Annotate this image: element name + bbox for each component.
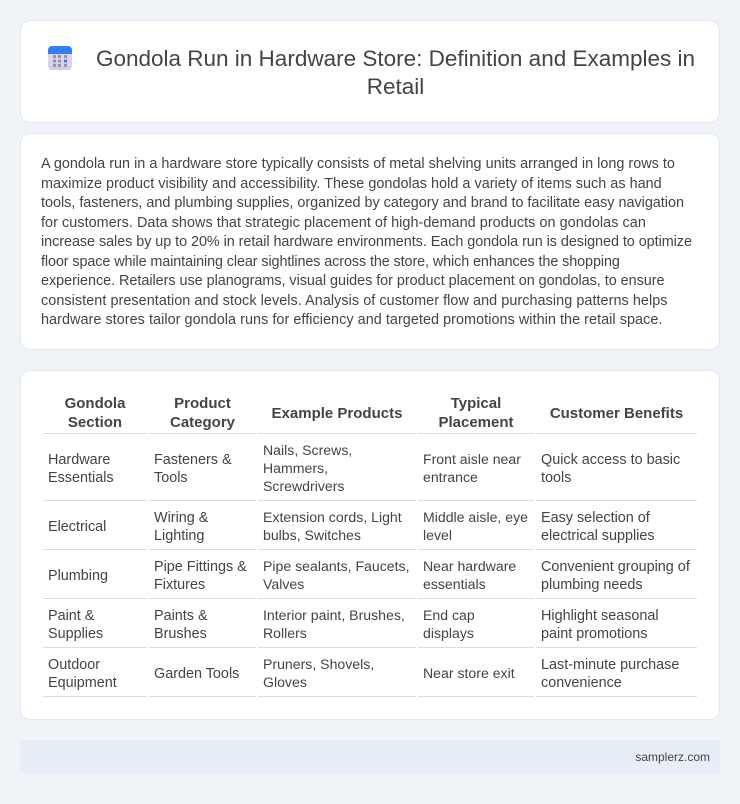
- table row: paint and supplies: displays: [423, 625, 474, 641]
- table row: electrical: electrical supplies: [541, 528, 655, 544]
- text block: description: floor space while maintaining clear sightlines across the store, which enhances the shopping: [41, 254, 620, 270]
- table row: outdoor equipment: Pruners, Shovels,: [263, 656, 374, 672]
- text block: description: [41, 156, 692, 328]
- text block: description: consistent presentation and stock levels. Analysis of customer flow and purchasing patterns helps: [41, 293, 668, 309]
- table row: paint and supplies: [43, 607, 697, 648]
- table header row: [43, 395, 697, 434]
- table row: electrical: Extension cords, Light: [263, 509, 402, 525]
- table row: plumbing: Fixtures: [154, 577, 205, 593]
- table row: plumbing: Valves: [263, 576, 304, 592]
- text block: description: experience. Retailers use planograms, visual guides for product placement on gondolas, to ensure: [41, 273, 664, 289]
- table row: plumbing: [43, 558, 697, 599]
- title: Gondola Run in Hardware Store: Definition and Examples in: [96, 46, 695, 71]
- table row: electrical: Wiring &: [154, 510, 208, 526]
- icon: calendar: [48, 46, 72, 70]
- table row: hardware essentials: Screwdrivers: [263, 478, 344, 494]
- table row: paint and supplies: Paint &: [48, 608, 94, 624]
- table header row: Typical: [451, 395, 501, 412]
- table row: electrical: [43, 509, 697, 550]
- text block: description: increase sales by up to 20% in retail hardware environments. Each gondola run is designed to optimize: [41, 234, 692, 250]
- title: [96, 46, 695, 99]
- table header row: Section: [68, 414, 122, 431]
- table header row: Customer Benefits: [550, 404, 683, 422]
- table header row: Category: [170, 414, 235, 431]
- table row: plumbing: Pipe Fittings &: [154, 559, 247, 575]
- table row: outdoor equipment: [43, 656, 697, 697]
- table row: hardware essentials: Hardware: [48, 452, 110, 468]
- panel: table card: [20, 370, 720, 720]
- text block: description: A gondola run in a hardware store typically consists of metal shelving units arranged in long rows to: [41, 156, 675, 172]
- table row: hardware essentials: entrance: [423, 469, 478, 485]
- table row: paint and supplies: Supplies: [48, 626, 103, 642]
- table row: hardware essentials: tools: [541, 470, 571, 486]
- table row: plumbing: plumbing needs: [541, 577, 643, 593]
- table row: hardware essentials: Front aisle near: [423, 451, 521, 467]
- table row: hardware essentials: Essentials: [48, 470, 114, 486]
- footer source text: samplerz.com: [635, 750, 710, 764]
- table row: hardware essentials: Tools: [154, 470, 188, 486]
- table row: outdoor equipment: Garden Tools: [154, 666, 239, 682]
- table header row: Gondola: [65, 395, 125, 412]
- table row: plumbing: Pipe sealants, Faucets,: [263, 558, 410, 574]
- table row: electrical: Middle aisle, eye: [423, 509, 528, 525]
- text block: description: tools, fasteners, and plumbing supplies, organized by category and brand to facilitate easy navigation: [41, 195, 684, 211]
- table row: electrical: bulbs, Switches: [263, 527, 361, 543]
- table row: plumbing: Near hardware: [423, 558, 516, 574]
- table row: plumbing: Convenient grouping of: [541, 559, 690, 575]
- table row: paint and supplies: paint promotions: [541, 626, 647, 642]
- table row: paint and supplies: Rollers: [263, 625, 307, 641]
- panel: title card: [20, 20, 720, 123]
- table row: plumbing: Plumbing: [48, 568, 108, 584]
- table row: electrical: Electrical: [48, 519, 106, 535]
- table row: electrical: level: [423, 527, 452, 543]
- table header row: Example Products: [272, 404, 402, 422]
- table row: electrical: Easy selection of: [541, 510, 650, 526]
- table row: outdoor equipment: Gloves: [263, 674, 307, 690]
- table row: plumbing: essentials: [423, 576, 486, 592]
- title: Retail: [367, 74, 424, 99]
- table row: paint and supplies: Brushes: [154, 626, 207, 642]
- table row: paint and supplies: Highlight seasonal: [541, 608, 659, 624]
- table row: outdoor equipment: Outdoor: [48, 657, 100, 673]
- table row: outdoor equipment: Near store exit: [423, 665, 515, 681]
- text block: description: for customers. Data shows that strategic placement of high-demand products on gondolas can: [41, 215, 646, 231]
- table row: paint and supplies: End cap: [423, 607, 475, 623]
- table row: outdoor equipment: convenience: [541, 675, 622, 691]
- table header row: Product: [174, 395, 231, 412]
- table row: outdoor equipment: Last-minute purchase: [541, 657, 679, 673]
- table row: paint and supplies: Paints &: [154, 608, 208, 624]
- table row: electrical: Lighting: [154, 528, 204, 544]
- panel: description card: [20, 133, 720, 350]
- table row: paint and supplies: Interior paint, Brushes,: [263, 607, 405, 623]
- text block: description: hardware stores tailor gondola runs for efficiency and targeted promotions within the retail space.: [41, 312, 662, 328]
- table row: hardware essentials: [43, 442, 697, 501]
- table row: hardware essentials: Hammers,: [263, 460, 328, 476]
- table row: outdoor equipment: Equipment: [48, 675, 117, 691]
- table row: hardware essentials: Nails, Screws,: [263, 442, 352, 458]
- table row: hardware essentials: Fasteners &: [154, 452, 232, 468]
- text block: description: maximize product visibility and accessibility. These gondolas hold a variety of items such as hand: [41, 176, 662, 192]
- table header row: Placement: [438, 414, 514, 431]
- footer bar: [20, 740, 720, 774]
- table row: hardware essentials: Quick access to basic: [541, 452, 680, 468]
